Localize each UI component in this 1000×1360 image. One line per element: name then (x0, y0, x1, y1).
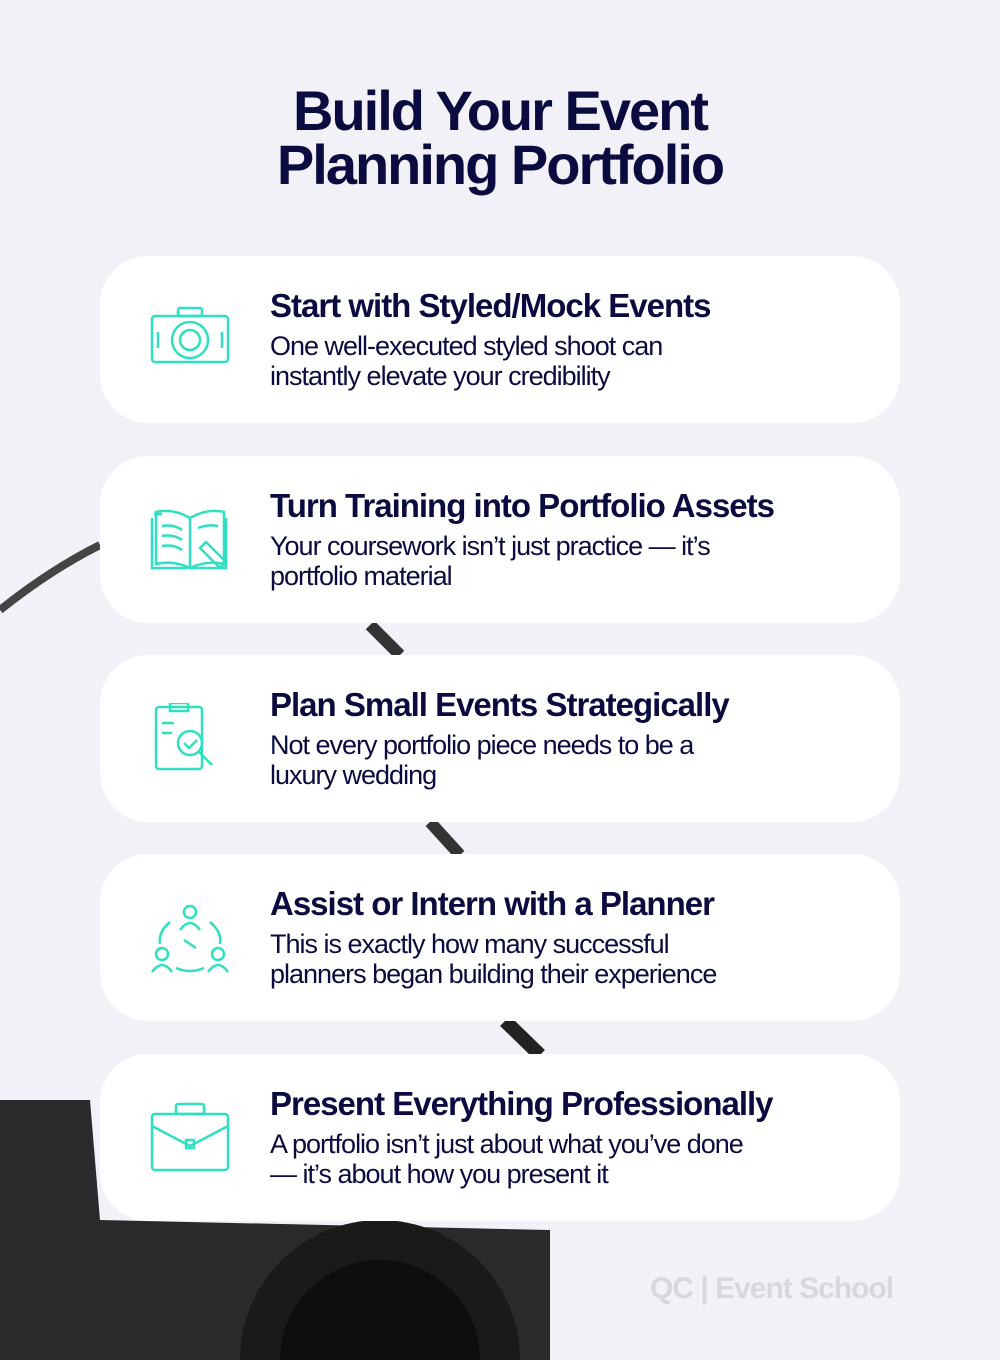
text: A portfolio isn’t just about what you’ve done — it’s about how you present it (270, 1129, 743, 1189)
text: This is exactly how many successful planners began building their experience (270, 929, 716, 989)
icon: book (150, 510, 228, 570)
card 4 (100, 854, 900, 1021)
icon: people network (151, 904, 229, 973)
heading: Start with Styled/Mock Events (270, 287, 710, 324)
card 2 (100, 456, 900, 623)
icon: clipboard search (154, 703, 213, 770)
heading: Plan Small Events Strategically (270, 686, 729, 723)
card 1 (100, 256, 900, 423)
card 3 (100, 655, 900, 822)
text: Your coursework isn’t just practice — it’s portfolio material (270, 531, 710, 591)
title: Planning Portfolio (277, 133, 723, 196)
text: Not every portfolio piece needs to be a luxury wedding (270, 730, 693, 790)
heading: Present Everything Professionally (270, 1085, 773, 1122)
title (277, 79, 723, 196)
title: Build Your Event (293, 79, 707, 142)
card 5 (100, 1054, 900, 1221)
icon: camera (150, 306, 230, 364)
heading: Turn Training into Portfolio Assets (270, 487, 774, 524)
text: One well-executed styled shoot can instantly elevate your credibility (270, 331, 662, 391)
heading: Assist or Intern with a Planner (270, 885, 714, 922)
logo: QC | Event School (650, 1272, 893, 1305)
icon: briefcase (150, 1102, 230, 1172)
